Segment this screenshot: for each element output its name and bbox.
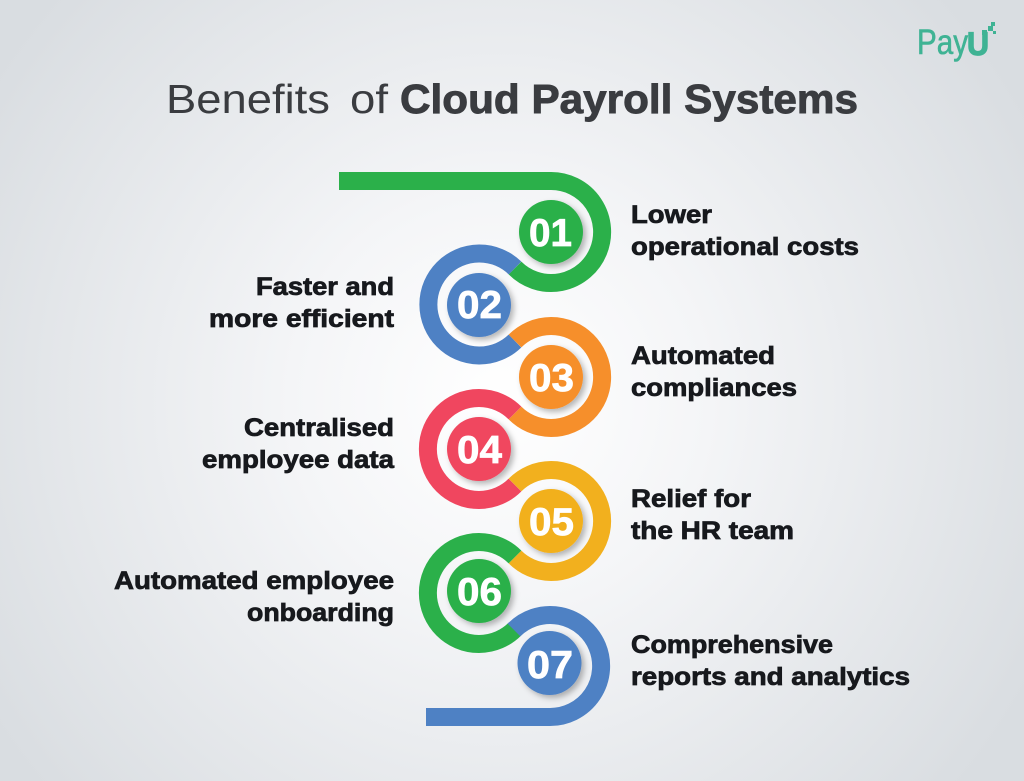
title: of: [350, 76, 389, 122]
label 07: reports and analytics: [631, 663, 910, 691]
step 04: ring, badge and number: 04: [457, 429, 502, 472]
step 01: ring, badge and number: 01: [529, 212, 572, 255]
label 04: [202, 414, 395, 474]
title: Benefits: [166, 76, 330, 122]
label 05: Relief for: [631, 485, 751, 513]
label 03: [631, 342, 797, 402]
step 03: ring, badge and number: 03: [529, 357, 574, 400]
label 07: Comprehensive: [631, 631, 833, 659]
step 02: ring, badge and number: 02: [457, 284, 502, 327]
step 07: ring, badge and number: 07: [527, 644, 573, 687]
step 05: ring, badge and number: [515, 470, 602, 572]
label 06: onboarding: [247, 599, 394, 627]
step 07: ring, badge and number: [426, 615, 601, 717]
label 05: [631, 485, 794, 545]
step 06: ring, badge and number: 06: [457, 571, 502, 614]
title: [166, 76, 858, 122]
label 06: Automated employee: [114, 567, 394, 595]
label 01: [631, 201, 859, 261]
step 02: ring, badge and number: [428, 254, 515, 356]
title: Cloud Payroll Systems: [400, 76, 858, 122]
step 06: ring, badge and number: [428, 542, 515, 644]
logo: PayU: Pay: [917, 23, 968, 62]
label 02: [209, 273, 395, 333]
label 07: [631, 631, 910, 691]
label 05: the HR team: [631, 517, 794, 545]
label 03: compliances: [631, 374, 797, 402]
label 04: Centralised: [244, 414, 394, 442]
step 03: ring, badge and number: [515, 326, 602, 428]
label 03: Automated: [631, 342, 775, 370]
step 04: ring, badge and number: [428, 398, 515, 500]
step 01: ring, badge and number: [339, 181, 602, 283]
label 02: more efficient: [209, 305, 395, 333]
label 01: Lower: [631, 201, 712, 229]
label 06: [114, 567, 394, 627]
label 02: Faster and: [256, 273, 394, 301]
step 05: ring, badge and number: 05: [529, 501, 574, 544]
label 01: operational costs: [631, 233, 859, 261]
label 04: employee data: [202, 446, 395, 474]
logo: PayU: U: [967, 26, 989, 62]
